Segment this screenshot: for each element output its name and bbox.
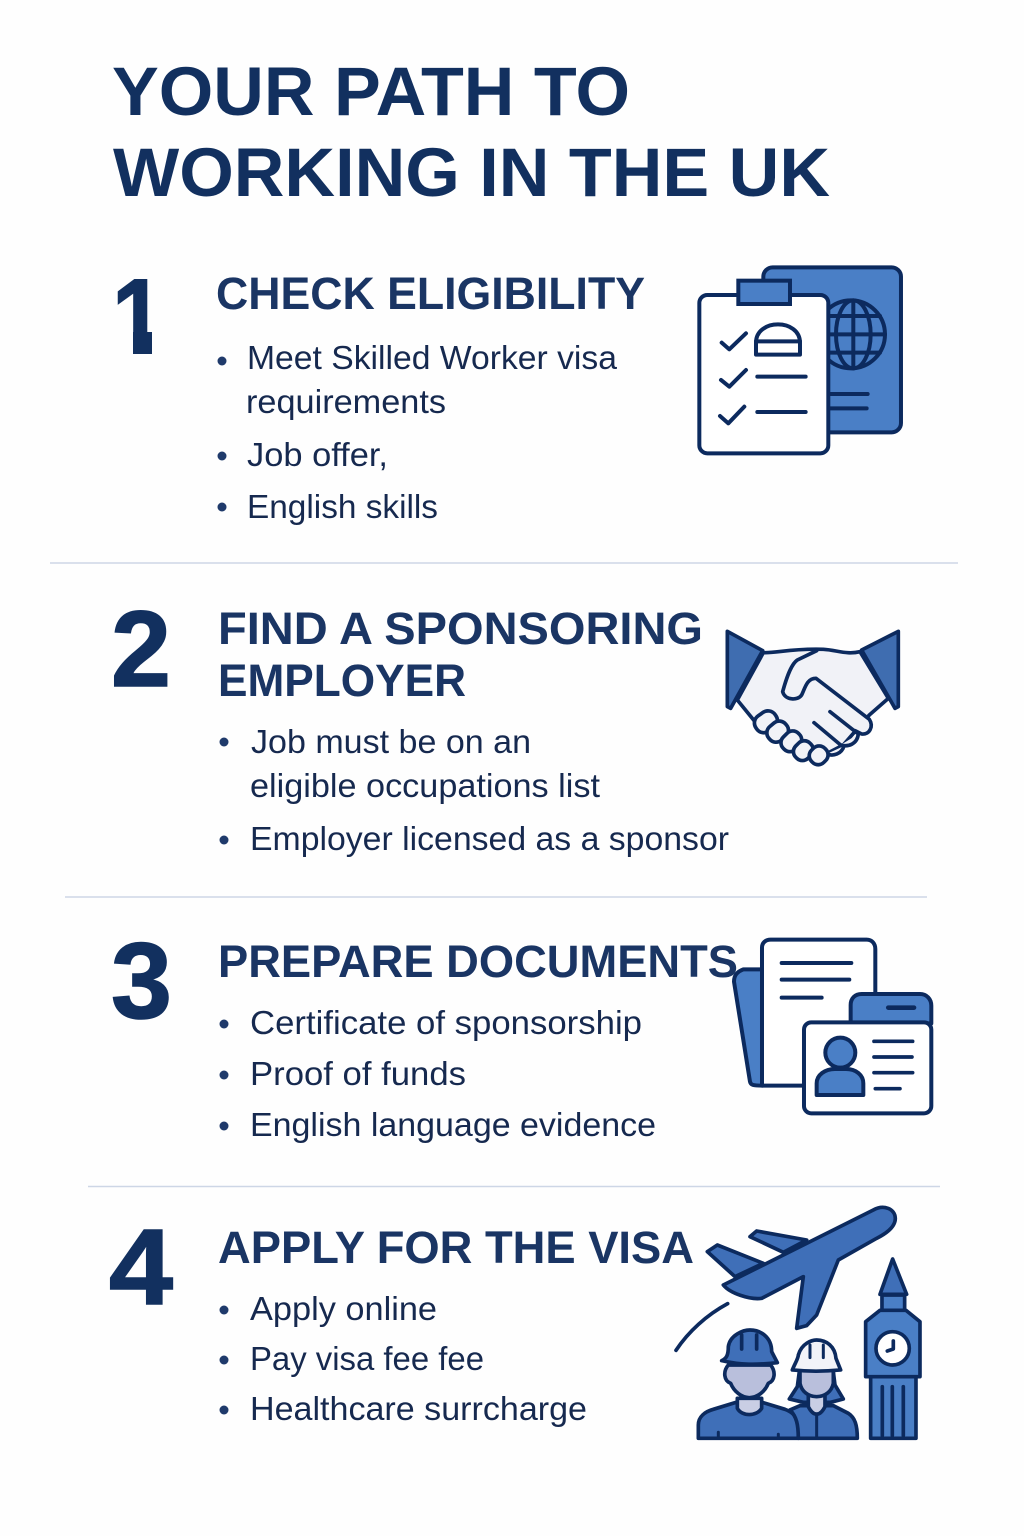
step 1 bullet list: Job offer, xyxy=(247,436,388,473)
step 4 bullet list: Pay visa fee fee xyxy=(250,1340,484,1377)
step 2 heading xyxy=(218,603,703,706)
step 3 panel: prepare documents xyxy=(111,920,931,1143)
step 4 bullet list xyxy=(220,1290,587,1427)
step 2 bullet list: Job must be on an xyxy=(251,723,531,760)
airplane xyxy=(707,1207,895,1328)
step 3 heading: PREPARE DOCUMENTS xyxy=(218,936,738,987)
step 3 bullet list: Certificate of sponsorship xyxy=(250,1004,642,1041)
step 2 bullet list xyxy=(220,723,729,857)
step 4 heading: APPLY FOR THE VISA xyxy=(218,1222,694,1273)
title xyxy=(112,53,830,211)
icon: handshake xyxy=(727,631,898,768)
worker right xyxy=(789,1340,857,1438)
icon: airplane, workers and Big Ben xyxy=(676,1207,920,1438)
step 1 bullet list: English skills xyxy=(247,488,438,525)
step 2 panel: find a sponsoring employer xyxy=(111,588,898,857)
worker left xyxy=(698,1330,798,1438)
step 1 panel: check eligibility xyxy=(112,256,901,525)
step number 1 xyxy=(118,279,152,354)
step 2 bullet list: Employer licensed as a sponsor xyxy=(250,820,729,857)
step 3 bullet list: Proof of funds xyxy=(250,1055,466,1092)
step number 1: 1 xyxy=(112,256,164,377)
step 3 bullet list xyxy=(220,1004,656,1143)
step 1 bullet list: Meet Skilled Worker visa xyxy=(247,339,618,376)
step number 4: 4 xyxy=(109,1206,173,1327)
step 1 bullet list xyxy=(218,339,618,525)
step 4 panel: apply for the visa xyxy=(109,1206,920,1438)
icon: passport and checklist clipboard xyxy=(699,267,901,453)
title: WORKING IN THE UK xyxy=(113,134,830,211)
step 1 heading: CHECK ELIGIBILITY xyxy=(216,268,645,319)
step 4 bullet list: Healthcare surrcharge xyxy=(250,1390,587,1427)
step 2 heading: FIND A SPONSORING xyxy=(218,603,703,654)
Big Ben xyxy=(866,1259,920,1438)
step 2 bullet list: eligible occupations list xyxy=(250,767,600,804)
step number 3: 3 xyxy=(111,920,172,1041)
step 1 bullet list: requirements xyxy=(246,383,446,420)
title: YOUR PATH TO xyxy=(112,53,630,130)
step number 2: 2 xyxy=(111,588,171,709)
icon: documents and ID card xyxy=(734,940,931,1113)
step 3 bullet list: English language evidence xyxy=(250,1106,656,1143)
step 2 heading: EMPLOYER xyxy=(218,655,466,706)
step 4 bullet list: Apply online xyxy=(250,1290,437,1327)
